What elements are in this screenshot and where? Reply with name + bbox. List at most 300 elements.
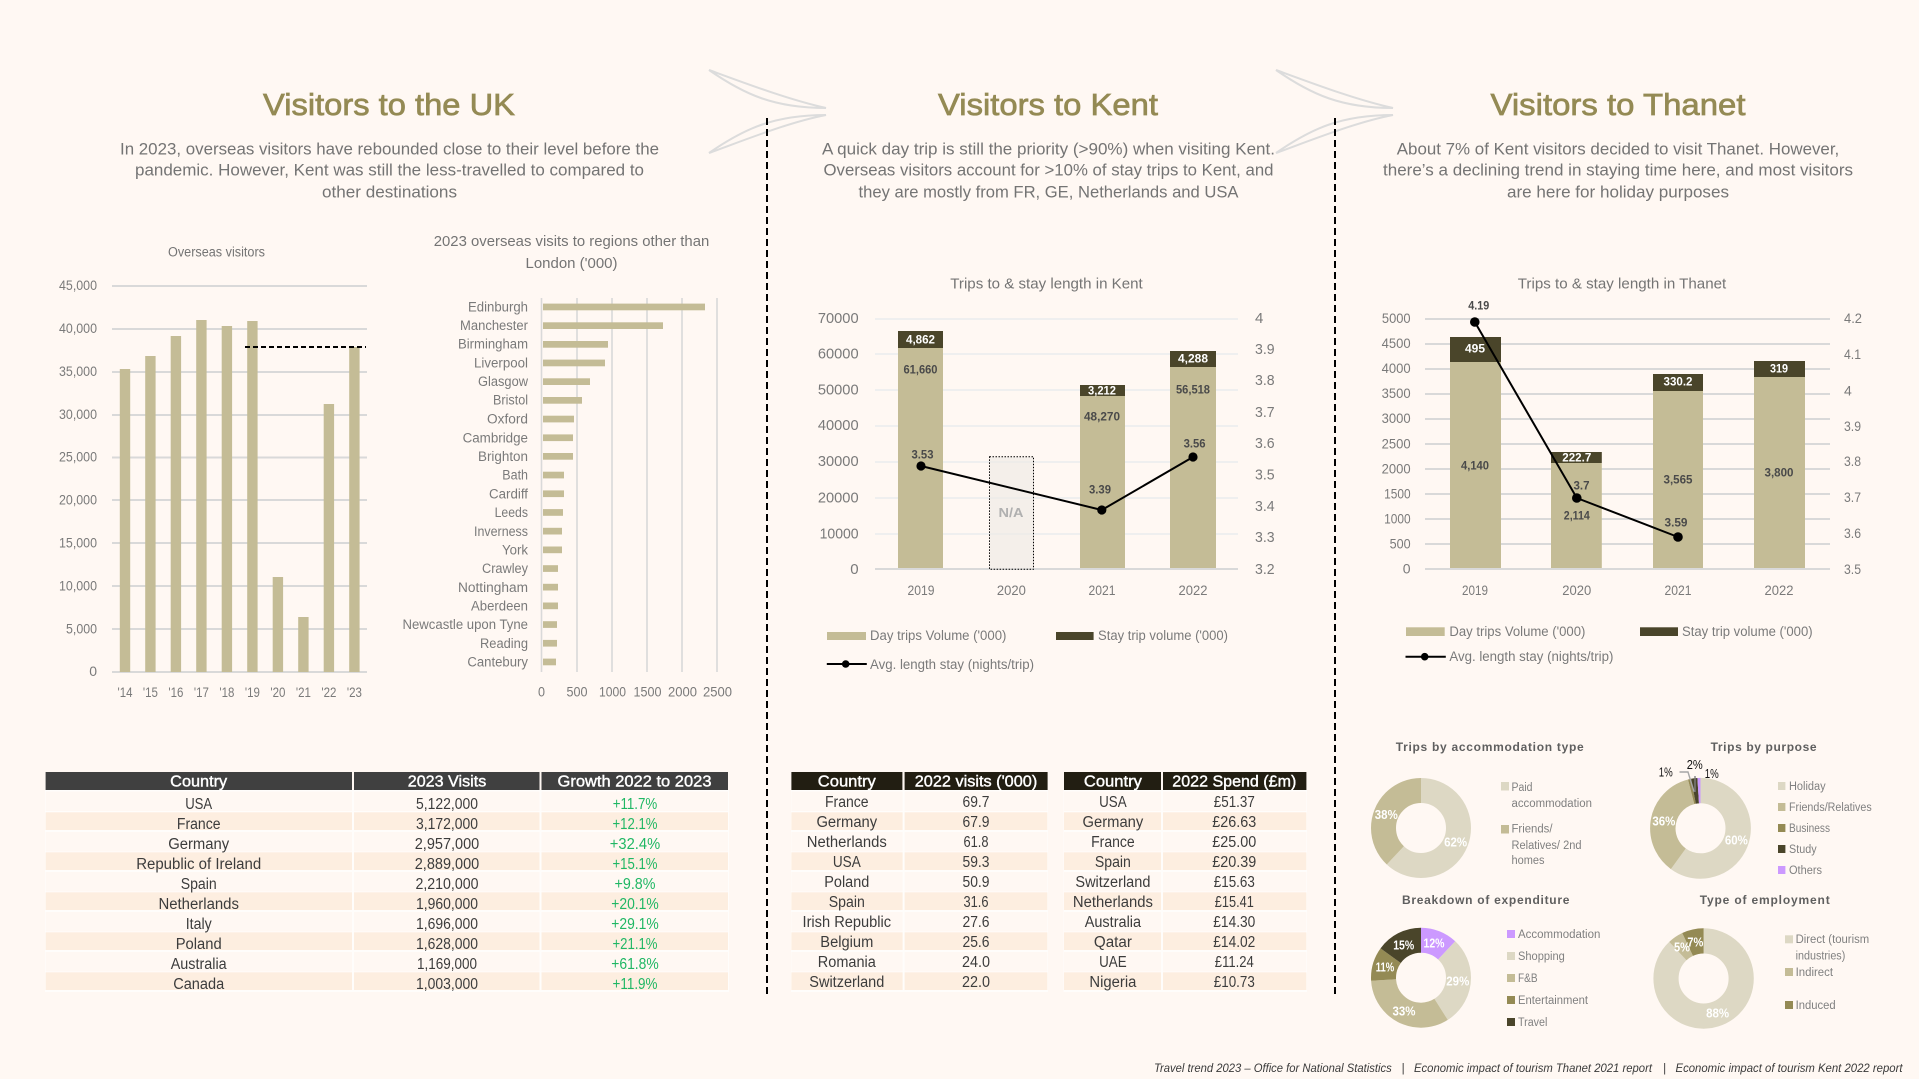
x axis labels: 2021 bbox=[1664, 582, 1692, 598]
region labels: Bristol bbox=[493, 392, 528, 408]
x axis labels bbox=[1462, 582, 1794, 598]
donut labels: 1% bbox=[1705, 767, 1719, 781]
table rows: £15.41 bbox=[1215, 894, 1254, 911]
x axis labels: 0 bbox=[538, 684, 545, 700]
x axis labels: '20 bbox=[270, 684, 286, 700]
right y axis labels: 3.6 bbox=[1255, 435, 1275, 452]
table header: Growth 2022 to 2023 bbox=[558, 774, 712, 791]
text block: Kent summary: Overseas visitors account for >10% of stay trips to Kent, and bbox=[824, 160, 1274, 180]
table rows: Spain bbox=[181, 876, 217, 893]
donut title: Trips by purpose bbox=[1711, 740, 1817, 754]
donut labels bbox=[1375, 808, 1467, 850]
legend: Accommodation bbox=[1518, 929, 1600, 941]
table: top countries visiting the UK bbox=[45, 772, 729, 993]
bar value labels: 48,270 bbox=[1084, 412, 1120, 424]
day trip bars bbox=[1450, 362, 1805, 568]
table rows: Italy bbox=[186, 916, 212, 933]
x axis labels bbox=[538, 684, 732, 700]
x axis labels: 2022 bbox=[1764, 582, 1794, 598]
y axis labels: 15,000 bbox=[59, 534, 97, 550]
line: average length of stay: 3.39 bbox=[1089, 485, 1111, 497]
chart: overseas visitors by year bbox=[59, 244, 367, 700]
region labels: Crawley bbox=[482, 561, 528, 576]
table rows: France bbox=[1091, 834, 1135, 851]
line: average length of stay: 4.19 bbox=[1468, 301, 1489, 313]
right y axis labels bbox=[1844, 310, 1862, 577]
table rows: France bbox=[177, 816, 220, 833]
left y axis labels: 0 bbox=[850, 561, 859, 578]
legend: Paid bbox=[1512, 782, 1532, 794]
donut labels: 5% bbox=[1674, 941, 1690, 955]
chart: 2023 overseas visits to regions bbox=[402, 234, 732, 700]
left y axis labels: 2500 bbox=[1382, 436, 1411, 452]
x axis labels: '19 bbox=[245, 684, 260, 700]
region labels: Glasgow bbox=[478, 374, 528, 389]
chart title: Trips to & stay length in Thanet bbox=[1518, 277, 1726, 293]
x axis labels: '21 bbox=[296, 684, 311, 700]
right y axis labels: 3.9 bbox=[1255, 341, 1275, 358]
right y axis labels: 3.8 bbox=[1255, 372, 1275, 389]
y axis labels: 35,000 bbox=[59, 363, 97, 379]
bar value labels bbox=[904, 334, 1211, 424]
bar value labels: 3,800 bbox=[1764, 467, 1794, 479]
table header: 2022 Spend (£m) bbox=[1172, 774, 1296, 791]
chart title: Overseas visitors bbox=[168, 244, 265, 260]
table rows: Spain bbox=[829, 894, 865, 911]
heading: Visitors to Kent: Visitors to Kent bbox=[938, 87, 1158, 122]
table rows: Netherlands bbox=[158, 896, 239, 913]
table rows: +61.8% bbox=[611, 956, 659, 973]
y axis labels: 40,000 bbox=[59, 320, 97, 336]
table rows: 59.3 bbox=[962, 854, 990, 871]
table rows: Irish Republic bbox=[802, 914, 891, 931]
chart title: Trips to & stay length in Kent bbox=[950, 277, 1143, 293]
left y axis labels: 500 bbox=[1390, 536, 1411, 552]
x axis labels: '14 bbox=[118, 684, 133, 700]
legend: Business bbox=[1789, 823, 1830, 835]
region labels: Cambridge bbox=[463, 430, 528, 446]
table: Kent spend by country bbox=[1064, 772, 1307, 992]
chart title: London ('000) bbox=[526, 256, 618, 272]
table rows: France bbox=[825, 794, 869, 811]
left y axis labels: 4000 bbox=[1382, 360, 1411, 376]
bars bbox=[120, 320, 360, 672]
legend: F&B bbox=[1518, 973, 1538, 985]
y axis labels: 10,000 bbox=[59, 578, 97, 594]
table rows: £15.63 bbox=[1214, 874, 1255, 891]
footer: sources: Travel trend 2023 – Office for National Statistics bbox=[1154, 1063, 1392, 1075]
bar value labels: 319 bbox=[1770, 363, 1788, 375]
left y axis labels: 2000 bbox=[1382, 460, 1411, 476]
table rows: Germany bbox=[1083, 814, 1143, 831]
chart title: 2023 overseas visits to regions other than bbox=[434, 234, 709, 250]
table rows: 3,172,000 bbox=[416, 816, 478, 833]
legend: Study bbox=[1789, 844, 1817, 856]
bar value labels: 4,288 bbox=[1178, 353, 1209, 365]
heading: Visitors to the UK: Visitors to the UK bbox=[263, 87, 515, 122]
left y axis labels bbox=[1382, 310, 1411, 576]
donut chart bbox=[1666, 941, 1741, 1016]
right y axis labels: 3.5 bbox=[1255, 466, 1275, 484]
donut labels: 62% bbox=[1444, 836, 1467, 850]
left y axis labels: 1500 bbox=[1384, 486, 1411, 502]
x axis labels: '23 bbox=[347, 684, 362, 700]
left y axis labels: 3000 bbox=[1382, 410, 1411, 426]
bar value labels: 495 bbox=[1465, 343, 1486, 355]
donut panel: trips by accommodation type bbox=[1375, 740, 1592, 867]
table rows: Poland bbox=[176, 936, 222, 953]
table rows: Canada bbox=[173, 976, 225, 993]
left y axis labels: 10000 bbox=[820, 526, 859, 542]
table rows: Germany bbox=[816, 814, 877, 831]
donut labels: 33% bbox=[1392, 1005, 1416, 1019]
table rows: 22.0 bbox=[962, 974, 990, 991]
table rows: Romania bbox=[818, 954, 876, 971]
footer: sources: | bbox=[1663, 1063, 1666, 1075]
text block: Thanet summary: are here for holiday purposes bbox=[1507, 182, 1729, 202]
table rows: 2,210,000 bbox=[416, 876, 479, 893]
left y axis labels: 20000 bbox=[818, 490, 859, 506]
legend: Friends/ bbox=[1512, 824, 1553, 836]
table rows: £20.39 bbox=[1212, 854, 1256, 871]
donut panel: trips by purpose bbox=[1652, 740, 1872, 877]
donut labels bbox=[1652, 758, 1748, 848]
text block: Kent summary: A quick day trip is still the priority (>90%) when visiting Kent. bbox=[822, 140, 1275, 158]
donut labels: 7% bbox=[1687, 935, 1703, 949]
table: Kent visits by country bbox=[791, 772, 1048, 992]
bar value labels: 4,862 bbox=[906, 334, 935, 346]
donut chart bbox=[1384, 790, 1458, 866]
table header bbox=[791, 772, 1048, 791]
legend: Holiday bbox=[1789, 781, 1826, 793]
table rows: Belgium bbox=[820, 934, 873, 951]
x axis labels: 2022 bbox=[1178, 582, 1208, 598]
table rows: USA bbox=[185, 796, 213, 813]
legend: Travel bbox=[1518, 1017, 1547, 1029]
legend: Friends/Relatives bbox=[1789, 802, 1872, 814]
region labels: Birmingham bbox=[458, 336, 528, 352]
x axis labels: '22 bbox=[321, 684, 337, 700]
y axis labels: 30,000 bbox=[59, 406, 97, 422]
x axis labels: '16 bbox=[168, 684, 184, 700]
legend bbox=[1501, 782, 1592, 867]
arrow: UK to Kent bbox=[709, 70, 826, 153]
table rows: Australia bbox=[1085, 914, 1141, 931]
table rows: £14.30 bbox=[1213, 914, 1256, 931]
table rows: Germany bbox=[168, 836, 229, 853]
bar value labels: 4,140 bbox=[1461, 461, 1489, 473]
donut labels: 60% bbox=[1725, 834, 1748, 848]
left y axis labels: 3500 bbox=[1382, 385, 1411, 401]
donut labels: 2% bbox=[1687, 758, 1703, 772]
legend bbox=[827, 628, 1228, 672]
y axis labels: 25,000 bbox=[59, 448, 97, 464]
line: average length of stay: 3.56 bbox=[1184, 439, 1206, 451]
bar value labels: 2,114 bbox=[1564, 511, 1590, 523]
legend: Stay trip volume ('000) bbox=[1098, 628, 1228, 643]
donut labels: 1% bbox=[1659, 766, 1673, 780]
x axis labels: 2020 bbox=[1562, 582, 1591, 598]
table rows: 2,957,000 bbox=[415, 836, 480, 853]
bar value labels: 222.7 bbox=[1562, 453, 1591, 465]
stay trip bars bbox=[898, 331, 1216, 396]
legend bbox=[1785, 934, 1869, 1012]
chart: trips and stay length in Kent bbox=[818, 277, 1275, 672]
legend bbox=[1507, 929, 1600, 1029]
table rows: +11.7% bbox=[613, 796, 657, 813]
legend: industries) bbox=[1796, 950, 1845, 962]
left y axis labels: 4500 bbox=[1382, 335, 1411, 351]
table rows: 27.6 bbox=[962, 914, 990, 931]
arrow: Kent to Thanet bbox=[1276, 70, 1393, 153]
chart title bbox=[434, 234, 709, 272]
text block: Thanet summary: there’s a declining trend in staying time here, and most visitors bbox=[1383, 160, 1853, 180]
region labels: Brighton bbox=[478, 449, 528, 464]
table header: 2023 Visits bbox=[408, 774, 487, 791]
table rows: Netherlands bbox=[1073, 894, 1153, 911]
donut labels: 29% bbox=[1446, 975, 1469, 989]
x axis labels bbox=[908, 582, 1208, 598]
table rows: Switzerland bbox=[809, 974, 884, 991]
table rows: +12.1% bbox=[612, 816, 658, 833]
line: average length of stay bbox=[1468, 301, 1688, 542]
legend: Day trips Volume ('000) bbox=[1449, 624, 1585, 639]
left y axis labels bbox=[818, 310, 859, 578]
region labels: Leeds bbox=[495, 505, 528, 520]
left y axis labels: 40000 bbox=[818, 417, 859, 434]
table rows: UAE bbox=[1099, 954, 1127, 971]
table rows: Nigeria bbox=[1089, 974, 1137, 991]
table rows: 25.6 bbox=[962, 934, 990, 951]
x axis labels: '18 bbox=[219, 684, 235, 700]
region labels bbox=[402, 300, 528, 670]
table rows: 5,122,000 bbox=[416, 796, 478, 813]
y axis labels: 0 bbox=[89, 663, 97, 679]
bar value labels: 56,518 bbox=[1176, 385, 1211, 397]
reference line: 2023 level bbox=[245, 346, 366, 348]
table rows: £14.02 bbox=[1213, 934, 1255, 951]
donut panel: breakdown of expenditure bbox=[1376, 893, 1600, 1029]
legend: Direct (tourism bbox=[1796, 934, 1869, 946]
donut title: Type of employment bbox=[1700, 893, 1830, 907]
table rows: Netherlands bbox=[807, 834, 887, 851]
left y axis labels: 0 bbox=[1403, 560, 1411, 576]
left y axis labels: 70000 bbox=[818, 310, 859, 327]
legend: Avg. length stay (nights/trip) bbox=[1449, 649, 1613, 664]
table rows bbox=[1064, 790, 1306, 992]
right y axis labels: 3.8 bbox=[1844, 453, 1861, 469]
region labels: Cardiff bbox=[489, 486, 528, 502]
bar value labels bbox=[1461, 343, 1794, 523]
donut labels: 38% bbox=[1375, 808, 1398, 822]
right y axis labels: 3.7 bbox=[1255, 404, 1275, 421]
footer: sources: Economic impact of tourism Kent 2022 report bbox=[1676, 1063, 1903, 1075]
x axis labels: 2021 bbox=[1088, 582, 1116, 598]
heading: Visitors to Thanet: Visitors to Thanet bbox=[1490, 87, 1746, 122]
region labels: York bbox=[502, 542, 528, 558]
table header: 2022 visits ('000) bbox=[915, 774, 1037, 791]
text block: UK summary: other destinations bbox=[322, 182, 457, 202]
table rows: £10.73 bbox=[1214, 974, 1255, 991]
stay trip bars bbox=[1450, 337, 1805, 463]
x axis labels: 1500 bbox=[634, 684, 662, 700]
table rows: £26.63 bbox=[1212, 814, 1256, 831]
table rows: 2,889,000 bbox=[415, 856, 480, 873]
table rows: 1,169,000 bbox=[417, 956, 477, 973]
x axis labels: 2019 bbox=[908, 582, 935, 598]
table rows: 24.0 bbox=[962, 954, 990, 971]
left y axis labels: 1000 bbox=[1384, 510, 1411, 526]
donut leader lines bbox=[1680, 772, 1695, 792]
donut labels bbox=[1376, 936, 1469, 1019]
right y axis labels: 3.4 bbox=[1255, 498, 1275, 515]
right y axis labels: 3.7 bbox=[1844, 489, 1861, 505]
table rows: +9.8% bbox=[614, 876, 656, 893]
left y axis labels: 60000 bbox=[818, 346, 859, 362]
x axis labels: 2500 bbox=[703, 684, 732, 700]
donut labels: 15% bbox=[1393, 938, 1414, 952]
line: average length of stay bbox=[912, 439, 1206, 515]
text block: UK summary bbox=[120, 140, 659, 202]
region labels: Bath bbox=[502, 468, 528, 482]
table rows: £11.24 bbox=[1215, 954, 1254, 971]
legend bbox=[1778, 781, 1872, 877]
right y axis labels: 4 bbox=[1255, 310, 1263, 327]
x axis labels: '15 bbox=[143, 684, 158, 700]
legend: Avg. length stay (nights/trip) bbox=[870, 657, 1034, 672]
donut panel: type of employment bbox=[1666, 893, 1869, 1021]
footer: sources bbox=[1154, 1063, 1903, 1075]
y axis labels: 5,000 bbox=[66, 620, 97, 636]
legend bbox=[1406, 624, 1813, 664]
table rows: Australia bbox=[171, 956, 227, 973]
donut title: Trips by accommodation type bbox=[1396, 740, 1584, 754]
x axis labels: 2019 bbox=[1462, 582, 1488, 598]
table rows: Republic of Ireland bbox=[136, 856, 261, 873]
region labels: Edinburgh bbox=[468, 300, 528, 314]
x axis labels: 2000 bbox=[668, 684, 697, 700]
table rows: 31.6 bbox=[964, 894, 988, 911]
table rows: 67.9 bbox=[962, 814, 990, 831]
table rows: 61.8 bbox=[964, 834, 988, 851]
right y axis labels: 4 bbox=[1844, 382, 1852, 398]
donut title: Breakdown of expenditure bbox=[1402, 893, 1570, 907]
x axis labels: '17 bbox=[194, 684, 209, 700]
legend: Others bbox=[1789, 865, 1822, 877]
right y axis labels: 4.1 bbox=[1844, 346, 1861, 362]
bar value labels: 3,565 bbox=[1664, 475, 1693, 487]
line: average length of stay: 3.59 bbox=[1664, 518, 1688, 530]
x axis labels: 1000 bbox=[599, 684, 626, 700]
table rows: +29.1% bbox=[611, 916, 659, 933]
table header: Country bbox=[1084, 774, 1142, 791]
2020 not available box bbox=[990, 457, 1034, 569]
donut chart bbox=[1663, 791, 1738, 866]
table rows bbox=[46, 790, 728, 993]
table rows: USA bbox=[1099, 794, 1127, 811]
text block: Thanet summary: About 7% of Kent visitors decided to visit Thanet. However, bbox=[1397, 140, 1839, 158]
right y axis labels: 4.2 bbox=[1844, 310, 1862, 326]
footer: sources: Economic impact of tourism Thanet 2021 report bbox=[1414, 1063, 1653, 1075]
bar value labels: 330.2 bbox=[1664, 377, 1692, 389]
region labels: Inverness bbox=[474, 524, 528, 539]
2020 not available box: N/A bbox=[998, 505, 1024, 520]
line: average length of stay: 3.7 bbox=[1574, 481, 1590, 493]
right y axis labels: 3.3 bbox=[1255, 529, 1275, 546]
region labels: Manchester bbox=[460, 318, 528, 333]
right y axis labels: 3.6 bbox=[1844, 525, 1861, 541]
donut labels: 36% bbox=[1652, 815, 1675, 829]
table header bbox=[46, 772, 728, 791]
table rows: +21.1% bbox=[612, 936, 658, 953]
table rows: +20.1% bbox=[611, 896, 659, 913]
region labels: Nottingham bbox=[458, 580, 528, 595]
left y axis labels: 50000 bbox=[818, 382, 859, 398]
table header: Country bbox=[818, 774, 876, 791]
region labels: Oxford bbox=[487, 412, 528, 426]
legend: Relatives/ 2nd bbox=[1512, 840, 1582, 852]
legend: Stay trip volume ('000) bbox=[1682, 624, 1813, 639]
y axis labels: 20,000 bbox=[59, 492, 97, 508]
footer: sources: | bbox=[1402, 1063, 1404, 1075]
bar value labels: 61,660 bbox=[904, 365, 938, 377]
bar value labels: 3,212 bbox=[1088, 386, 1116, 398]
text block: UK summary: pandemic. However, Kent was still the less-travelled to compared to bbox=[135, 160, 644, 180]
horizontal bars bbox=[543, 304, 705, 665]
x axis labels: 2020 bbox=[997, 582, 1026, 598]
table rows: +32.4% bbox=[610, 836, 660, 853]
table rows: 1,696,000 bbox=[416, 916, 478, 933]
table header: Country bbox=[170, 774, 227, 791]
table rows bbox=[791, 790, 1047, 992]
left y axis labels: 30000 bbox=[818, 453, 859, 470]
region labels: Liverpool bbox=[474, 356, 528, 370]
left y axis labels: 5000 bbox=[1382, 310, 1411, 326]
legend: Shopping bbox=[1518, 951, 1565, 963]
text block: Kent summary bbox=[822, 140, 1275, 202]
x axis labels bbox=[118, 684, 362, 700]
table rows: +15.1% bbox=[612, 856, 658, 873]
legend: homes bbox=[1512, 855, 1545, 867]
donut labels bbox=[1674, 935, 1729, 1021]
donut chart bbox=[1384, 940, 1458, 1015]
table rows: Qatar bbox=[1094, 934, 1132, 951]
right y axis labels: 3.2 bbox=[1255, 561, 1275, 578]
legend: Entertainment bbox=[1518, 995, 1589, 1007]
table header bbox=[1064, 772, 1306, 791]
donut labels: 11% bbox=[1376, 961, 1394, 975]
y axis labels bbox=[59, 277, 97, 679]
region labels: Newcastle upon Tyne bbox=[402, 617, 528, 632]
x axis labels: 500 bbox=[566, 684, 588, 700]
right y axis labels bbox=[1255, 310, 1275, 578]
table rows: £25.00 bbox=[1212, 834, 1257, 851]
right y axis labels: 3.5 bbox=[1844, 561, 1861, 577]
legend: Indirect bbox=[1796, 967, 1834, 979]
donut labels: 12% bbox=[1424, 936, 1444, 950]
y axis labels: 45,000 bbox=[59, 277, 97, 293]
text block: Kent summary: they are mostly from FR, GE, Netherlands and USA bbox=[858, 182, 1239, 202]
donut labels: 88% bbox=[1706, 1007, 1729, 1021]
right y axis labels: 3.9 bbox=[1844, 418, 1861, 434]
table rows: Switzerland bbox=[1075, 874, 1150, 891]
table rows: 50.9 bbox=[962, 874, 990, 891]
table rows: +11.9% bbox=[612, 976, 658, 993]
day trip bars bbox=[898, 348, 1216, 568]
table rows: 1,003,000 bbox=[416, 976, 478, 993]
chart: trips and stay length in Thanet bbox=[1382, 277, 1862, 664]
table rows: USA bbox=[833, 854, 861, 871]
